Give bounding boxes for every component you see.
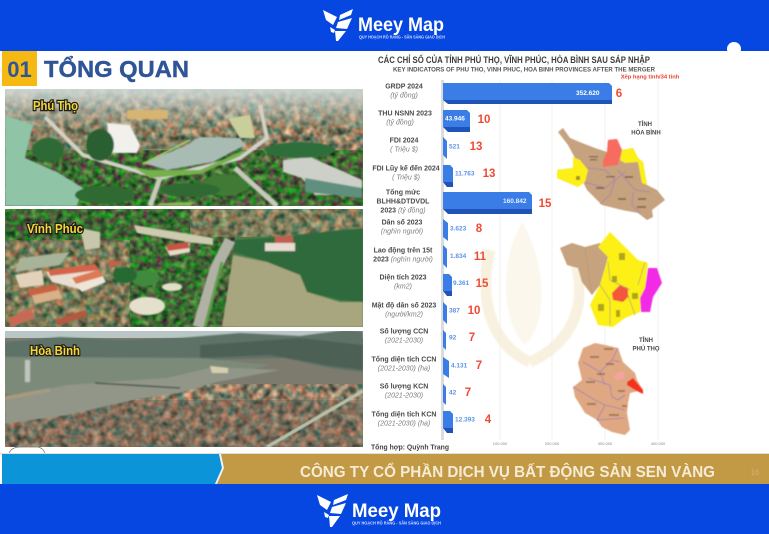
page number: 16	[751, 468, 760, 477]
row: Dân số	[381, 218, 483, 241]
row: FDI luỹ kế: 11.763	[455, 170, 475, 178]
row: FDI 2024: ( Triệu $)	[390, 146, 418, 154]
axis labels: 400.000	[651, 441, 666, 446]
row: Tổng mức: 2023 (tỷ đồng)	[380, 206, 426, 214]
row: Số lượng KCN: 7	[465, 387, 471, 399]
row: Tổng mức: BLHH&DTDVDL	[377, 198, 430, 206]
row: Tổng diện tích CCN: 7	[476, 360, 482, 372]
logo wordmark bottom: Meey Map	[352, 501, 441, 522]
number badge	[2, 51, 37, 86]
photo: Hòa Bình	[5, 330, 363, 447]
rank legend: Xếp hạng tỉnh/34 tỉnh	[621, 74, 680, 80]
row: Tổng diện tích KCN: Tổng diện tích KCN	[372, 410, 436, 418]
bottom brand band	[0, 484, 769, 534]
map label: Hòa Bình: HÒA BÌNH	[631, 128, 661, 136]
seal detail	[9, 447, 45, 453]
row: Tổng diện tích CCN: 4.131	[451, 362, 468, 370]
chart title: CÁC CHỈ SỐ CỦA TỈNH PHÚ THỌ, VĨNH PHÚC, HÒA BÌNH SAU SÁP NHẬP	[378, 54, 650, 65]
row: Số lượng KCN: (2021-2030)	[385, 392, 423, 400]
row: Lao động: 2023 (nghìn người)	[373, 256, 433, 264]
row: GRDP: 352.620	[576, 90, 600, 97]
row: FDI 2024: FDI 2024	[390, 138, 419, 144]
source credit: Tổng hợp: Quỳnh Trang	[371, 444, 449, 452]
banner text: CÔNG TY CỔ PHẦN DỊCH VỤ BẤT ĐỘNG SẢN SEN VÀNG	[300, 463, 715, 481]
icon: Meey Map logo top	[323, 9, 353, 41]
map label: Hòa Bình	[631, 121, 661, 136]
row: Tổng diện tích CCN: (2021-2030) (ha)	[378, 366, 430, 372]
row: FDI luỹ kế: 13	[483, 168, 495, 180]
heading text: TỔNG QUAN	[44, 55, 189, 82]
row: Dân số: Dân số 2023	[382, 218, 423, 226]
row: Tổng diện tích KCN	[372, 410, 492, 433]
row: Số lượng CCN: 7	[469, 332, 475, 344]
row: Dân số: 8	[476, 223, 483, 235]
logo tagline top: QUY HOẠCH RÕ RÀNG - SẴN SÀNG GIAO DỊCH	[359, 34, 446, 40]
map label: Phú Thọ: PHÚ THỌ	[632, 346, 660, 352]
row: Mật độ: 10	[468, 305, 480, 317]
row: Tổng diện tích CCN	[372, 356, 482, 378]
row: FDI luỹ kế: FDI Lũy kế đến 2024	[372, 164, 440, 172]
row: Mật độ	[372, 302, 480, 324]
row: Số lượng CCN: (2021-2030)	[385, 338, 423, 344]
row: Dân số: 3.623	[450, 226, 467, 232]
row: Tổng mức	[377, 188, 552, 214]
row: Số lượng CCN	[380, 328, 475, 350]
row: Tổng mức: Tổng mức	[386, 188, 420, 196]
row: Mật độ: 387	[449, 308, 460, 314]
icon: Meey Map logo bottom	[317, 494, 348, 527]
row: Lao động: 11	[474, 251, 487, 263]
row: Mật độ: (người/km2)	[385, 312, 423, 318]
row: Diện tích: (km2)	[394, 284, 412, 290]
row: Lao động: Lao động trên 15t	[374, 248, 433, 254]
logo wordmark top: Meey Map	[358, 15, 444, 36]
row: Số lượng KCN: Số lượng KCN	[380, 382, 428, 390]
axis labels: 300.000	[598, 441, 613, 446]
row: THU NSNN: (tỷ đồng)	[386, 118, 414, 126]
axis labels: 200.000	[545, 441, 560, 446]
row: Số lượng CCN: 92	[449, 334, 457, 342]
row: FDI 2024	[390, 137, 482, 159]
photo: Phú Thọ	[5, 89, 363, 206]
number badge: 01	[7, 57, 32, 82]
section heading	[2, 51, 189, 86]
row: THU NSNN: 10	[478, 114, 490, 126]
logo tagline bottom: QUY HOẠCH RÕ RÀNG - SẴN SÀNG GIAO DỊCH	[352, 520, 442, 526]
photo caption: Phú Thọ	[33, 98, 78, 113]
chart subtitle: KEY INDICATORS OF PHU THO, VINH PHUC, HOA BINH PROVINCES AFTER THE MERGER	[393, 66, 655, 74]
row: GRDP	[385, 83, 622, 104]
row: Lao động: 1.834	[450, 253, 467, 260]
map: Vĩnh Phúc	[560, 232, 662, 327]
row: Số lượng KCN	[380, 382, 471, 405]
company banner	[0, 453, 769, 484]
row: GRDP: GRDP 2024	[385, 84, 423, 90]
row: THU NSNN: 43.946	[445, 116, 465, 122]
row: Tổng mức: 160.842	[503, 198, 527, 205]
row: Diện tích: 15	[476, 278, 489, 290]
axis labels: 100.000	[493, 441, 508, 446]
row: FDI 2024: 13	[470, 141, 482, 153]
row: Tổng diện tích CCN: Tổng diện tích CCN	[372, 356, 436, 364]
row: FDI luỹ kế	[372, 164, 495, 187]
row: GRDP: 6	[616, 88, 622, 100]
row: Số lượng CCN: Số lượng CCN	[380, 328, 428, 336]
top brand band	[0, 0, 769, 51]
row: FDI luỹ kế: ( Triệu $)	[392, 174, 420, 182]
decorative circle	[727, 42, 741, 56]
row: Tổng diện tích KCN: 12.393	[455, 416, 475, 424]
row: THU NSNN	[378, 110, 490, 132]
row: FDI 2024: 521	[449, 144, 460, 150]
row: Diện tích	[379, 274, 489, 296]
row: Tổng diện tích KCN: 4	[485, 414, 492, 426]
photo caption: Hòa Bình	[30, 343, 80, 358]
row: GRDP: (tỷ đồng)	[390, 90, 418, 100]
row: Lao động	[373, 245, 487, 268]
row: Diện tích: 9.361	[453, 280, 470, 287]
row: Mật độ: Mật độ dân số 2023	[372, 302, 436, 310]
photo: Vĩnh Phúc	[5, 209, 363, 327]
row: Dân số: (nghìn người)	[381, 228, 423, 236]
map label: Phú Thọ	[632, 337, 660, 352]
row: Tổng diện tích KCN: (2021-2030) (ha)	[378, 420, 430, 428]
bar chart	[372, 80, 666, 446]
lotus watermark	[486, 222, 580, 362]
map label: Hòa Bình: TỈNH	[638, 121, 652, 128]
row: THU NSNN: THU NSNN 2023	[378, 110, 432, 118]
map: Hòa Bình	[557, 128, 665, 220]
map label: Phú Thọ: TỈNH	[639, 337, 653, 344]
row: Diện tích: Diện tích 2023	[379, 274, 427, 282]
map: Phú Thọ	[573, 343, 643, 435]
axis labels	[493, 441, 666, 446]
photo caption: Vĩnh Phúc	[27, 221, 83, 236]
row: Tổng mức: 15	[539, 198, 552, 210]
row: Số lượng KCN: 42	[449, 390, 457, 396]
